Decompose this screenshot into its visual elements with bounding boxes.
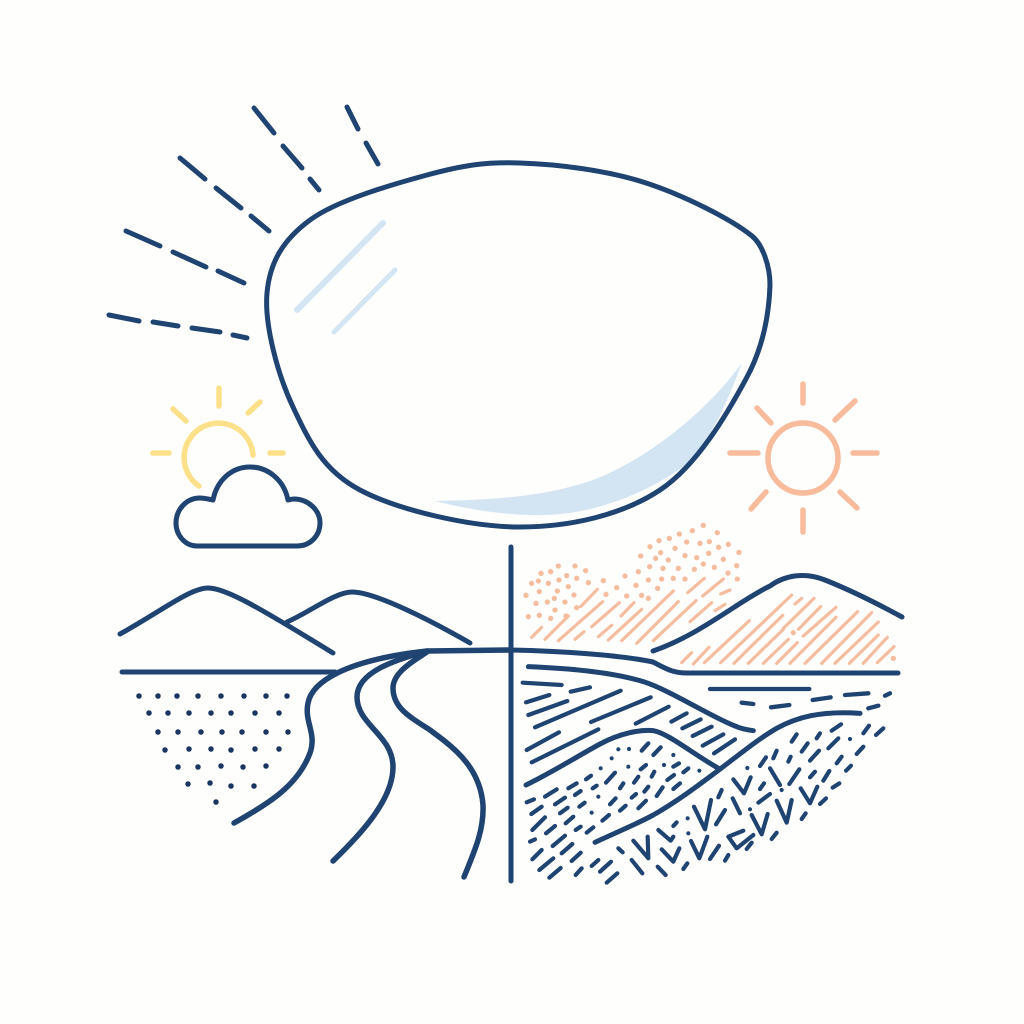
orange hatching and dots (526, 525, 894, 664)
icon: cloud (176, 467, 320, 546)
grass dashes (618, 724, 883, 875)
field hatching (523, 683, 735, 762)
navy terrain texture (523, 667, 890, 883)
icon: dashed sun rays hitting the lens (109, 107, 378, 338)
left mountains (120, 588, 333, 653)
dash field (527, 743, 699, 883)
road curves (234, 650, 511, 823)
panel: right hazy landscape (511, 525, 902, 883)
lens glare strokes (297, 223, 383, 310)
horizon dashes (710, 689, 890, 708)
grass ticks (633, 777, 817, 862)
left hill hatching (532, 578, 730, 643)
divider: vertical line (508, 547, 514, 881)
left horizon (122, 670, 335, 674)
lens crescent highlight (435, 363, 742, 515)
orange dots (526, 525, 893, 658)
right mountain (653, 575, 902, 651)
left dot field (139, 696, 288, 802)
lens outline (267, 163, 770, 527)
right hill hatching (682, 595, 894, 664)
terrain curves (528, 667, 753, 731)
icon: orange sun (730, 384, 877, 532)
panel: left clear landscape (120, 588, 511, 877)
icon: yellow sun (153, 388, 283, 486)
right horizon (511, 650, 898, 673)
icon: lens (267, 163, 770, 527)
